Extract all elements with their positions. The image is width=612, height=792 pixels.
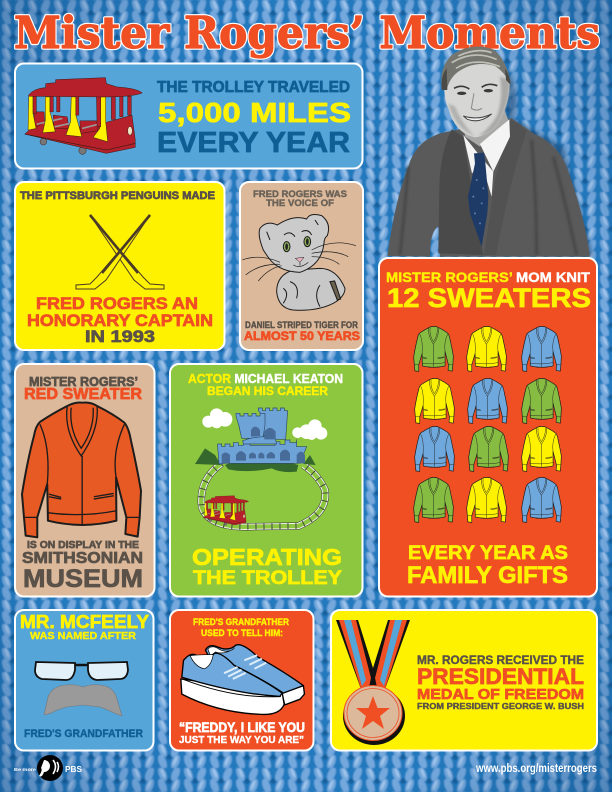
hair (441, 47, 511, 90)
panel: shoes: FRED'S GRANDFATHER (193, 617, 289, 627)
panel: Pittsburgh Penguins: IN 1993 (85, 328, 155, 346)
face (454, 84, 497, 89)
sweater grid (414, 326, 561, 522)
icon: blue sneakers (181, 645, 304, 714)
cardigan (387, 118, 590, 257)
panel: red sweater (15, 364, 154, 596)
castle (218, 408, 307, 464)
title: Mister Rogers’ Moments (14, 8, 600, 59)
title: Mister Rogers’ Moments (14, 8, 600, 59)
panel: shoes: “FREDDY, I LIKE YOU (179, 719, 305, 735)
panel: Daniel Striped Tiger: ALMOST 50 YEARS (244, 329, 360, 343)
tie (468, 153, 488, 247)
trolley text: 5,000 MILES (158, 97, 351, 128)
panel: red sweater: MUSEUM (23, 565, 143, 593)
panel: Mr. McFeely: FRED'S GRANDFATHER (24, 728, 143, 740)
panel: Pittsburgh Penguins: THE PITTSBURGH PENGUINS MADE (20, 190, 215, 202)
panel: Michael Keaton: BEGAN HIS CAREER (207, 386, 329, 398)
footer: PBS logo: Be more (14, 767, 37, 772)
panel: Daniel Striped Tiger: DANIEL STRIPED TIGER FOR (245, 320, 358, 331)
panel: 12 sweaters (379, 258, 597, 596)
footer: PBS logo (14, 755, 82, 781)
panel: 12 sweaters: EVERY YEAR AS (408, 542, 568, 564)
panel: red sweater: MISTER ROGERS’ (29, 375, 138, 389)
panel: Presidential Medal of Freedom: FROM PRESIDENT GEORGE W. BUSH (417, 701, 584, 711)
panel: Michael Keaton: THE TROLLEY (193, 567, 342, 589)
shirt collar (463, 119, 510, 197)
panel: Michael Keaton: OPERATING (192, 544, 342, 570)
neck (463, 107, 508, 147)
trolley text: EVERY YEAR (157, 127, 350, 159)
icon: red cardigan (22, 402, 141, 537)
panel: 12 sweaters: FAMILY GIFTS (407, 562, 568, 589)
panel: Pittsburgh Penguins: HONORARY CAPTAIN (27, 312, 213, 330)
clouds (202, 408, 327, 440)
panel: 12 sweaters: MISTER ROGERS’ MOM KNIT (386, 269, 590, 285)
trolley text: THE TROLLEY TRAVELED (157, 79, 350, 96)
panel: Daniel Striped Tiger (240, 182, 363, 350)
panel: Michael Keaton (170, 364, 362, 596)
trolley text (157, 79, 351, 159)
footer: PBS logo: PBS (65, 764, 82, 774)
panel: Daniel Striped Tiger: FRED ROGERS WAS (253, 189, 347, 200)
panel: red sweater: SMITHSONIAN (22, 550, 143, 567)
icon: mustache (44, 685, 122, 716)
panel: red sweater: RED SWEATER (24, 386, 142, 403)
icon: small trolley (203, 496, 249, 525)
panel: Mr. McFeely (15, 610, 154, 750)
panel: Pittsburgh Penguins: FRED ROGERS AN (36, 295, 198, 313)
panel: red sweater: IS ON DISPLAY IN THE (27, 539, 139, 551)
panel: Mr. McFeely: WAS NAMED AFTER (30, 630, 136, 642)
panel: 12 sweaters: 12 SWEATERS (387, 283, 591, 313)
panel: Daniel Striped Tiger: THE VOICE OF (266, 198, 334, 209)
panel: trolley miles (15, 64, 362, 168)
panel: shoes (170, 610, 314, 750)
bushes (195, 448, 316, 472)
panel: Michael Keaton: ACTOR MICHAEL KEATON (188, 372, 343, 386)
panel: Mr. McFeely: MR. MCFEELY (20, 612, 149, 632)
track (201, 463, 325, 527)
panel: shoes: JUST THE WAY YOU ARE” (179, 734, 304, 746)
icon: red trolley (25, 78, 142, 154)
photo: Fred Rogers in cardigan (387, 47, 593, 257)
icon: medal (336, 620, 410, 745)
panel: Presidential Medal of Freedom: PRESIDENTIAL (417, 664, 584, 689)
panel: shoes: USED TO TELL HIM: (201, 628, 283, 638)
icon: tiger (242, 215, 356, 310)
icon: glasses (35, 662, 128, 680)
panel: Presidential Medal of Freedom: MEDAL OF FREEDOM (417, 686, 584, 703)
icon: crossed hockey sticks (76, 215, 164, 289)
panel: Pittsburgh Penguins (15, 182, 224, 350)
illustration: castle and train track (195, 408, 327, 527)
panel: Presidential Medal of Freedom (331, 610, 597, 750)
head (444, 50, 510, 137)
panel: Presidential Medal of Freedom: MR. ROGERS RECEIVED THE (417, 655, 584, 667)
